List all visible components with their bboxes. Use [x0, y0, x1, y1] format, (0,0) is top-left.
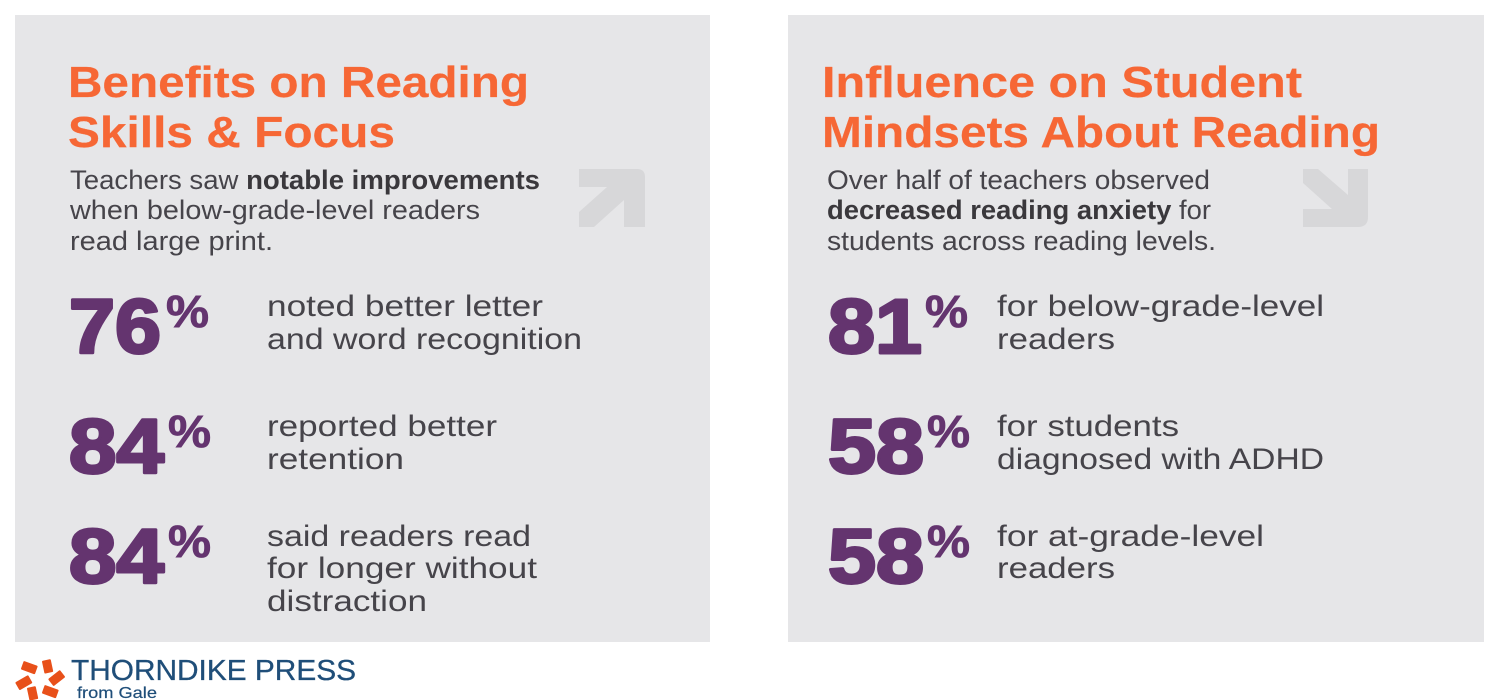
stat: 84 percent retention	[69, 404, 497, 490]
stat: 84 percent longer reading: for longer without	[267, 552, 538, 585]
stat: 76 percent: and word recognition	[267, 323, 582, 356]
stat: 58 percent ADHD: diagnosed with ADHD	[997, 443, 1324, 476]
stat: 58 percent ADHD: 58	[828, 404, 924, 490]
stat: 84 percent longer reading: %	[168, 516, 211, 567]
panel: influence on student mindsets	[788, 15, 1484, 642]
stat: 81 percent: for below-grade-level	[997, 290, 1324, 323]
stat: 81 percent: readers	[997, 323, 1115, 356]
heading: benefits	[68, 58, 529, 157]
stat: 58 percent at grade level: readers	[997, 552, 1115, 585]
panel: benefits on reading skills and focus	[15, 15, 710, 642]
intro text: influence: students across reading levels.	[827, 226, 1216, 256]
stat: 84 percent longer reading: 84	[69, 514, 164, 600]
stat: 81 percent	[828, 284, 1324, 370]
stat: 84 percent longer reading	[69, 514, 538, 618]
stat: 76 percent: noted better letter	[267, 290, 543, 323]
stat: 58 percent ADHD: %	[927, 406, 970, 457]
stat: 84 percent retention: 84	[69, 404, 164, 490]
stat: 84 percent longer reading: said readers read	[267, 520, 531, 553]
intro text: influence	[827, 165, 1216, 256]
stat: 76 percent: 76	[69, 284, 161, 370]
heading: influence: Mindsets About Reading	[822, 108, 1380, 157]
stat: 81 percent: 81	[828, 284, 922, 370]
stat: 58 percent ADHD	[828, 404, 1324, 490]
icon: arrow down right	[1303, 169, 1368, 227]
stat: 84 percent longer reading: distraction	[267, 585, 427, 618]
stat: 84 percent retention: %	[168, 406, 211, 457]
stat: 58 percent at grade level: for at-grade-level	[997, 520, 1264, 553]
logo: Thorndike Press from Gale: THORNDIKE PRESS	[71, 655, 356, 687]
icon: arrow up right	[579, 169, 645, 227]
heading: influence: Influence on Student	[822, 58, 1302, 107]
stat: 58 percent ADHD: for students	[997, 410, 1179, 443]
stat: 58 percent at grade level: %	[927, 516, 970, 567]
stat: 58 percent at grade level: 58	[828, 514, 924, 600]
heading: influence	[822, 58, 1380, 157]
stat: 84 percent retention: reported better	[267, 410, 497, 443]
stat: 81 percent: %	[925, 286, 968, 337]
stat: 84 percent retention: retention	[267, 443, 404, 476]
intro text: benefits: when below-grade-level readers	[69, 195, 480, 225]
stat: 58 percent at grade level	[828, 514, 1264, 600]
intro text: benefits: Teachers saw notable improvements	[70, 165, 540, 195]
intro text: influence: Over half of teachers observed	[827, 165, 1210, 195]
stat: 76 percent: %	[166, 286, 209, 337]
intro text: benefits	[69, 165, 540, 256]
heading: benefits: Skills & Focus	[68, 108, 395, 157]
intro text: influence: decreased reading anxiety for	[827, 195, 1211, 225]
intro text: benefits: read large print.	[70, 226, 273, 256]
stat: 76 percent	[69, 284, 582, 370]
heading: benefits: Benefits on Reading	[68, 58, 529, 107]
logo: Thorndike Press from Gale	[15, 655, 356, 700]
icon: logo starburst	[15, 659, 65, 700]
